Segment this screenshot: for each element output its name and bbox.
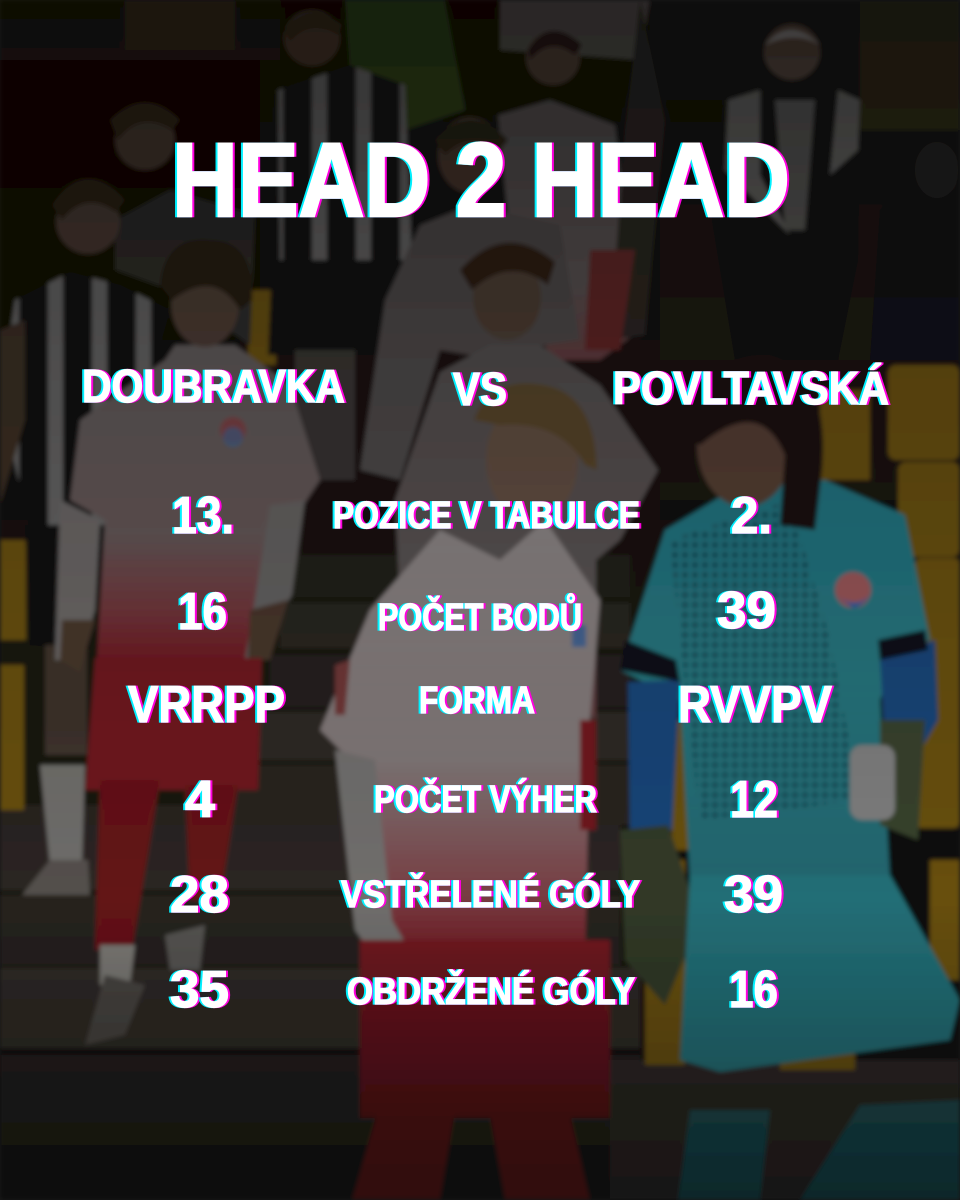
stat row: form (128, 676, 832, 734)
stat row: form: VRRPP (128, 676, 285, 734)
white and red player middle (395, 243, 658, 720)
stat row: wins: 4 (185, 771, 215, 829)
striped player top centre (268, 10, 412, 480)
neon green jersey player at top (345, 0, 465, 130)
stat row: league position: 2. (731, 487, 772, 545)
stat row: goals scored (170, 866, 783, 924)
stat row: goals conceded: OBDRŽENÉ GÓLY (347, 969, 635, 1013)
stat row: goals conceded (170, 961, 778, 1019)
stat row: points: 16 (178, 583, 227, 641)
stat row: league position: POZICE V TABULCE (333, 495, 640, 537)
away team name: POVLTAVSKÁ (613, 362, 889, 414)
stat row: goals conceded: 35 (170, 961, 229, 1019)
stat row: form: FORMA (419, 680, 535, 722)
stat row: form: RVVPV (678, 676, 832, 734)
versus label: VS (453, 363, 507, 415)
player behind left (110, 102, 255, 345)
yellow stadium seats (0, 290, 960, 1070)
player Doubravka front left (55, 240, 320, 1045)
stat row: wins: POČET VÝHER (374, 776, 597, 821)
stat row: league position (172, 487, 772, 545)
stat row: goals scored: 39 (724, 866, 783, 924)
stat row: goals scored: 28 (170, 866, 229, 924)
old man spectator (712, 24, 860, 360)
striped left player (0, 179, 170, 895)
dark spectator far right (870, 142, 960, 360)
stat row: league position: 13. (172, 487, 234, 545)
stat row: wins: 12 (730, 771, 778, 829)
stat row: goals scored: VSTŘELENÉ GÓLY (341, 872, 640, 916)
stat row: points: POČET BODŮ (378, 592, 582, 639)
white and red player upper right (498, 0, 665, 360)
player front centre (320, 383, 610, 1200)
stat row: wins (185, 771, 778, 829)
home team name: DOUBRAVKA (82, 360, 345, 412)
white player behind centre (360, 117, 580, 480)
stat row: points: 39 (717, 582, 776, 640)
team names row (82, 360, 889, 415)
stat row: goals conceded: 16 (729, 961, 778, 1019)
goalkeeper front right (620, 355, 960, 1200)
title: HEAD 2 HEAD (172, 122, 790, 239)
stat row: points (178, 582, 776, 641)
concrete steps (0, 520, 960, 1200)
